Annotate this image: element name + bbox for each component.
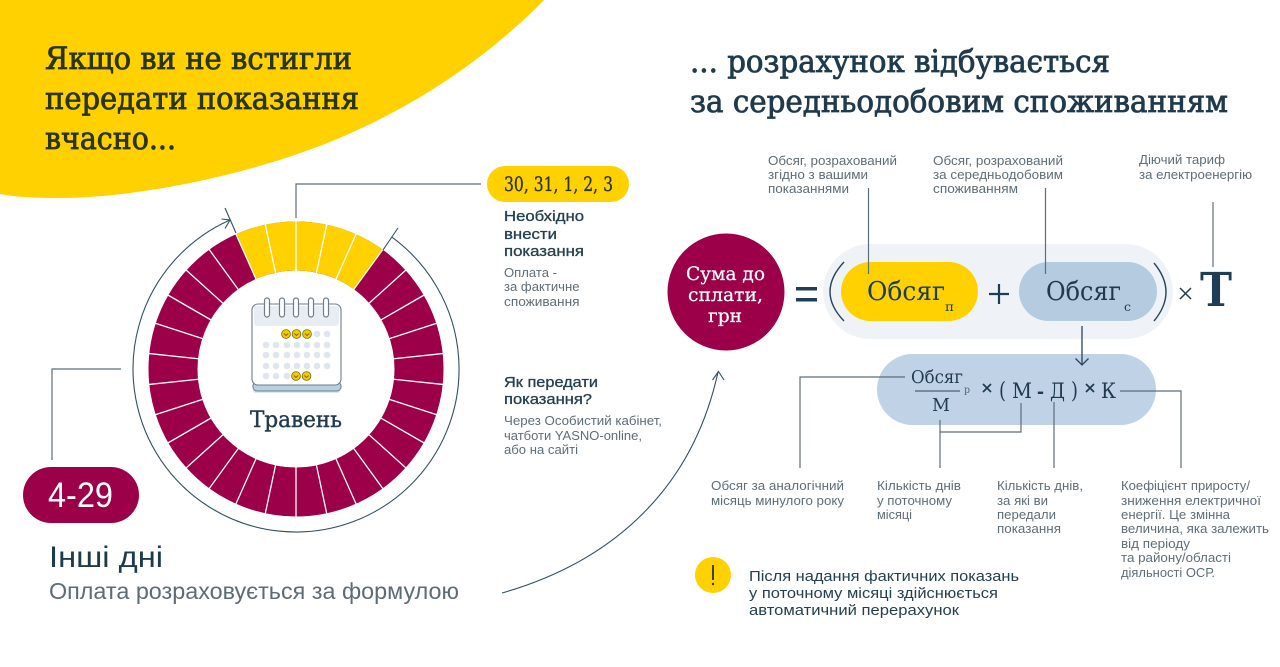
parentheses [830,262,1166,321]
title: right: за середньодобовим споживанням [690,84,1228,120]
text: submit readings: споживання [504,294,580,309]
label: tariff [1139,152,1252,182]
badge: other days: 4-29 [48,476,113,515]
total circle [668,234,784,350]
label: actual volume: показаннями [768,181,849,196]
title: left: передати показання [45,81,359,117]
text: submit readings: Оплата - [504,265,557,280]
arrow: to formula [502,372,724,593]
sub-formula panel [877,354,1156,425]
text: submit readings: Необхідно [504,209,584,225]
text: how to submit: Як передати [504,375,598,391]
label: tariff: Діючий тариф [1139,152,1225,167]
connector: yellow days [296,184,481,218]
label: last year volume: Обсяг за аналогічний [711,478,844,493]
label: average volume: Обсяг, розрахований [933,153,1063,168]
term: actual volume: п [945,300,954,314]
label: days submitted: показання [997,521,1061,536]
badge: yellow days: 30, 31, 1, 2, 3 [504,173,613,196]
total circle: грн [708,306,742,327]
title: left: вчасно... [45,121,176,157]
label: coefficient: величина, яка залежить [1121,521,1269,536]
callout lines: top [868,188,1213,274]
label: tariff: за електроенергію [1139,167,1252,182]
term: average volume: Обсяг [1046,277,1121,307]
term: actual volume: Обсяг [867,277,945,307]
yellow corner shape [0,0,544,198]
label: coefficient: Коефіцієнт приросту/ [1121,478,1250,493]
text: how to submit [504,375,662,457]
connector: other days [52,369,121,460]
sub-formula panel: р [964,385,970,396]
sub-formula panel: М [1012,379,1032,403]
text: submit readings: показання [504,244,584,260]
badge: yellow days [487,166,629,202]
label: coefficient: діяльності ОСР. [1121,565,1215,580]
term: actual volume [841,262,978,321]
month label: Травень [250,408,342,433]
multiply sign [1180,288,1191,299]
label: coefficient: та району/області [1121,550,1231,565]
sub-formula panel: Д [1050,379,1065,403]
term: average volume [1019,262,1157,321]
note: recalculation: автоматичний перерахунок [749,602,959,619]
sub-formula panel: - [1037,381,1044,403]
label: actual volume: згідно з вашими [768,167,868,182]
title: right [690,44,1228,120]
title: left: Якщо ви не встигли [45,41,352,77]
label: average volume: за середньодобовим [933,167,1063,182]
label: days submitted [997,478,1083,536]
label: days in month: Кількість днів [877,478,961,493]
sub-formula panel: Обсяг [911,368,963,388]
note: recalculation: Після надання фактичних показань [749,568,1019,585]
icon: warning [695,557,731,593]
label: last year volume [711,478,844,508]
text: other days: Оплата розраховується за формулою [49,578,459,604]
sub-formula panel: К [1101,379,1116,403]
label: coefficient: енергії. Це змінна [1121,507,1231,522]
label: average volume: споживанням [933,181,1018,196]
arrow: to sub-formula [1076,326,1088,365]
text: submit readings [504,209,584,309]
badge: other days [23,467,139,523]
plus sign [989,284,1009,304]
label: days in month: місяці [877,507,912,522]
icon: calendar [252,298,341,393]
equals sign [796,287,817,302]
title: left [45,41,359,157]
formula panel [823,244,1173,339]
arrow: arc around the ring [133,208,459,532]
sub-formula panel: ( [999,379,1006,404]
label: coefficient: зниження електричної [1121,493,1261,508]
note: recalculation [749,568,1019,619]
label: days in month: у поточному [877,493,952,508]
term: average volume: с [1124,300,1131,314]
text: how to submit: Через Особистий кабінет, [504,413,662,428]
label: last year volume: місяць минулого року [711,493,844,508]
label: average volume [933,153,1063,196]
text: other days [49,541,459,604]
label: days submitted: Кількість днів, [997,478,1083,493]
total circle: Сума до [686,264,765,285]
label: actual volume: Обсяг, розрахований [768,153,897,168]
label: days submitted: передали [997,507,1056,522]
label: actual volume [768,153,897,196]
title: right: ... розрахунок відбувається [690,44,1110,80]
text: submit readings: за фактичне [504,279,580,294]
label: coefficient: від періоду [1121,536,1190,551]
label: days in month [877,478,961,522]
tariff symbol: Т [1200,263,1232,318]
label: days submitted: за які ви [997,493,1048,508]
text: how to submit: або на сайті [504,442,578,457]
text: submit readings: внести [504,227,557,243]
note: recalculation: у поточному місяці здійснюється [749,585,998,602]
sub-formula panel: ) [1071,379,1078,404]
text: how to submit: чатботи YASNO-online, [504,428,642,443]
label: coefficient [1121,478,1269,580]
text: other days: Інші дні [49,541,163,574]
text: how to submit: показання? [504,392,592,408]
callout lines: bottom [800,377,1181,468]
total circle: сплати, [688,285,763,306]
sub-formula panel: М [932,395,950,416]
month ring chart [134,207,458,531]
